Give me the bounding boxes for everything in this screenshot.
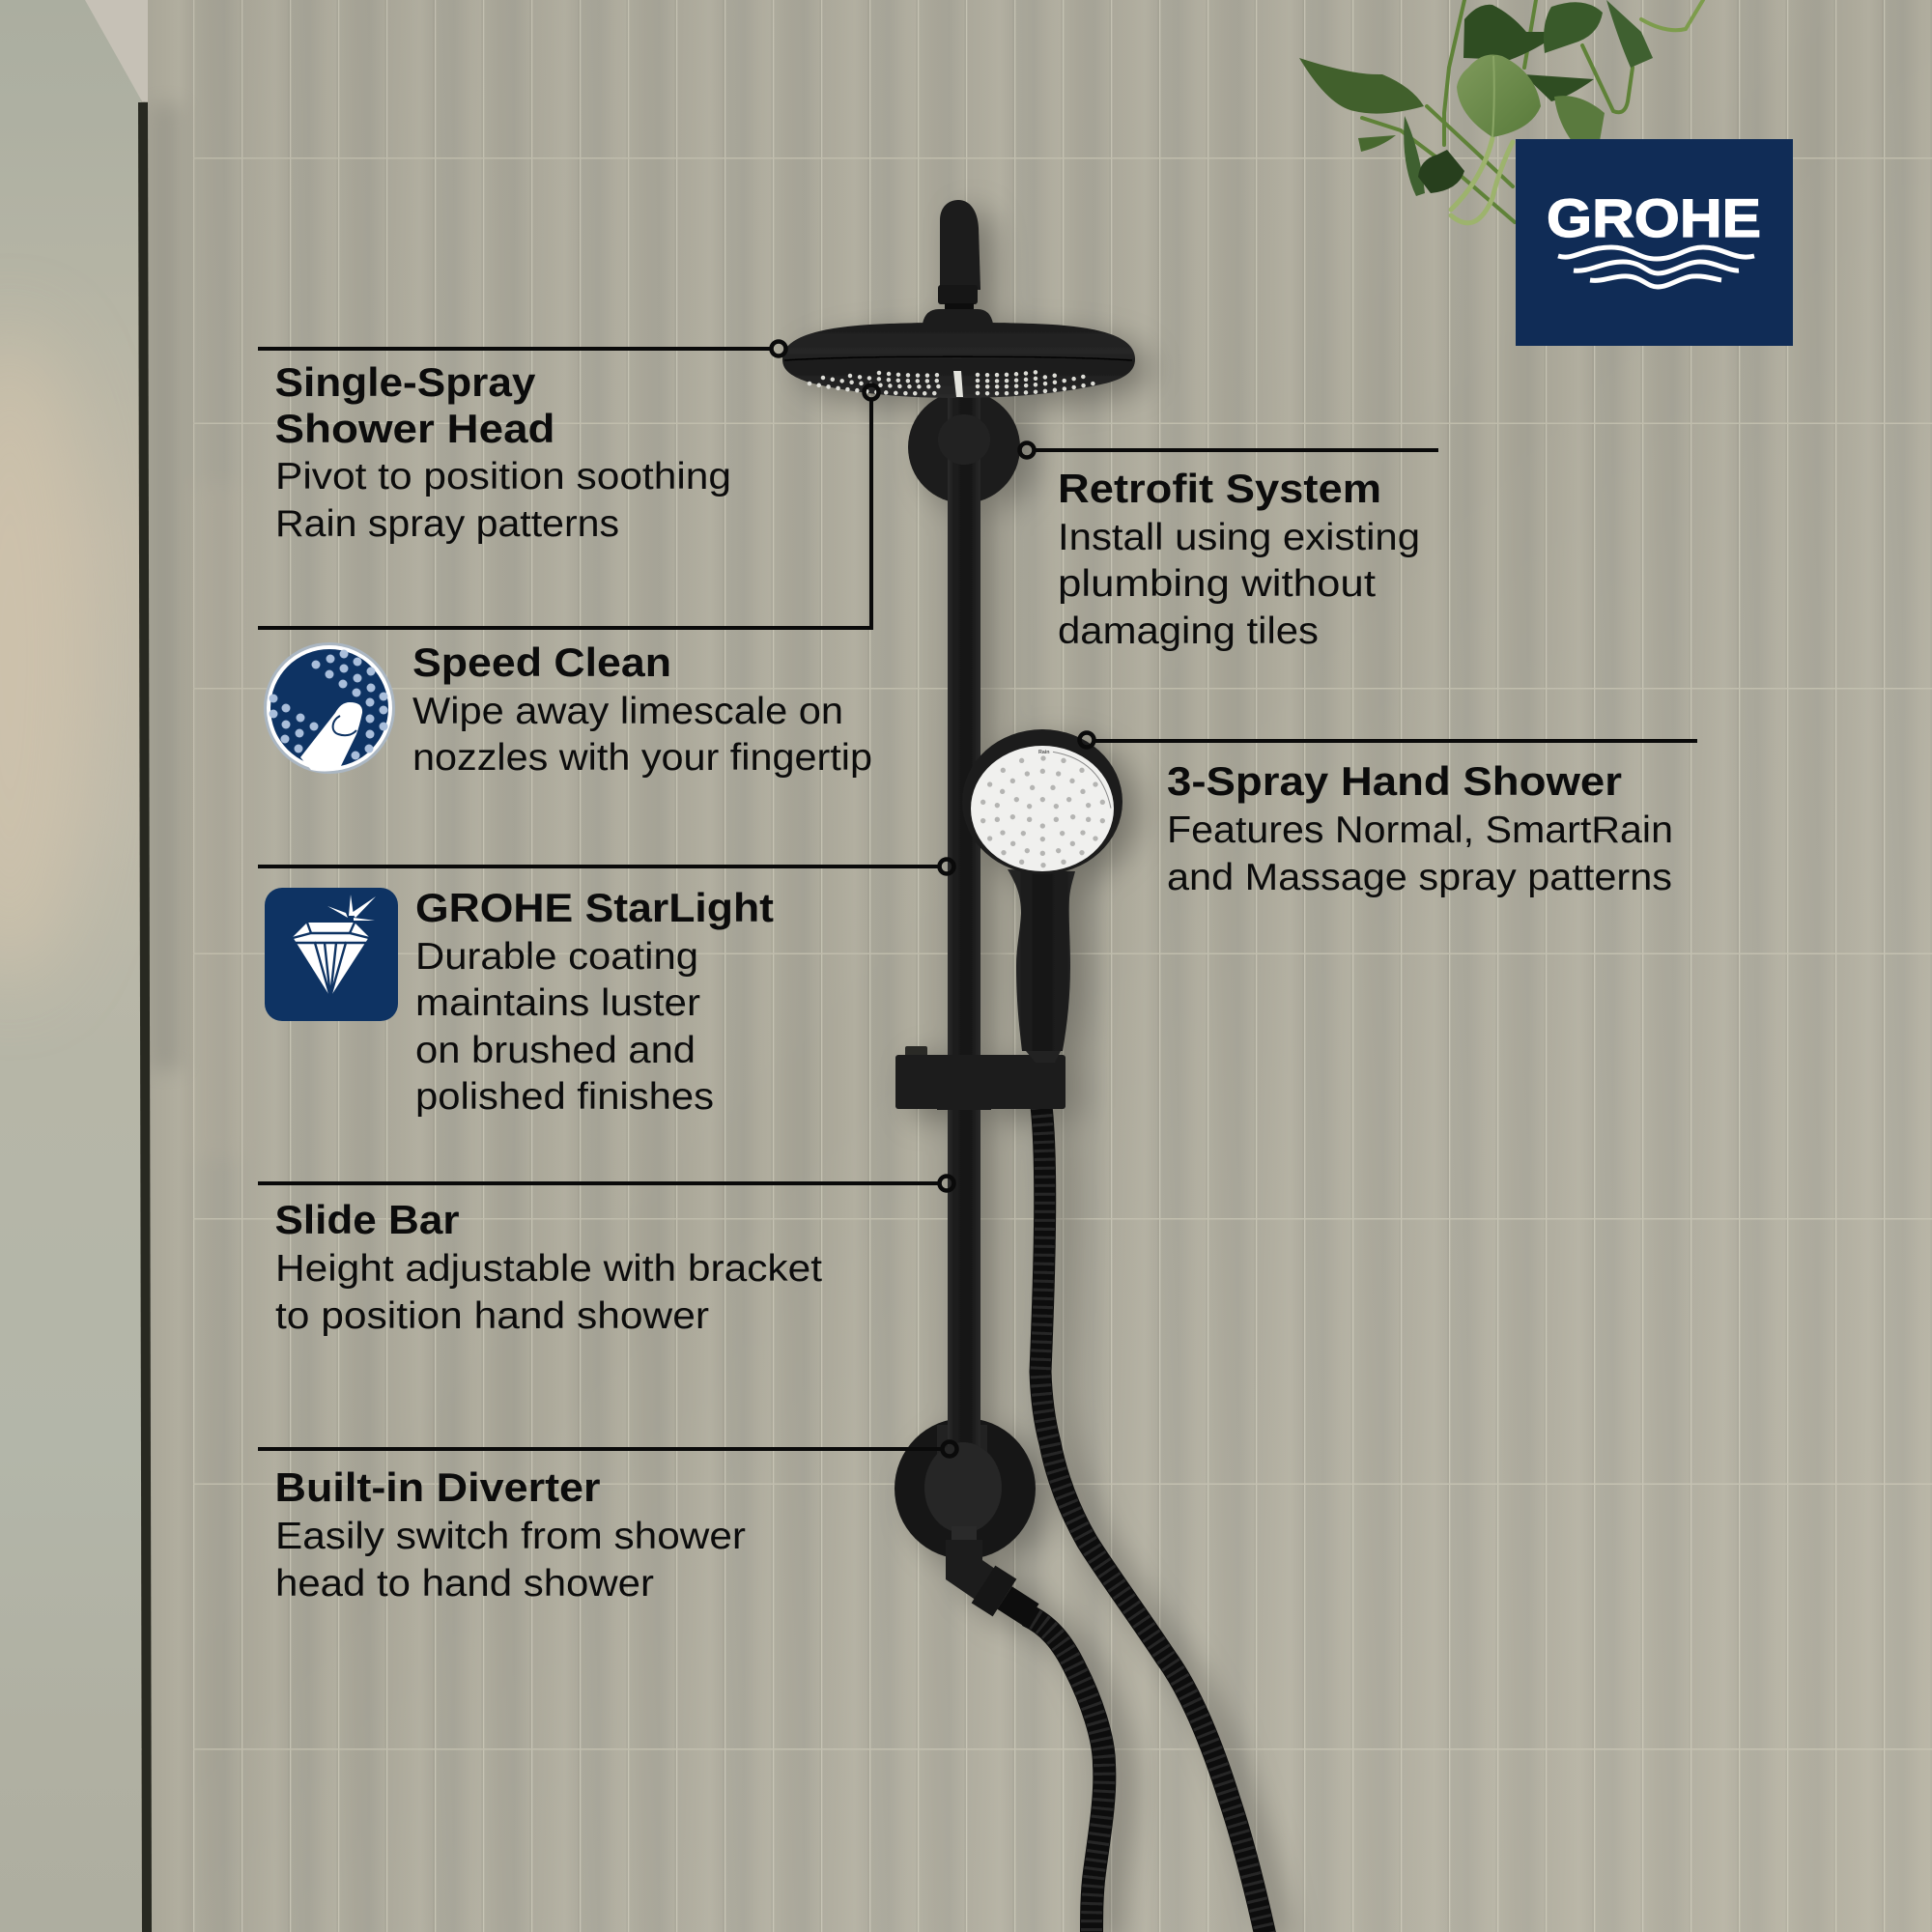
callout: Built-in Diverter: Easily switch from shower xyxy=(275,1516,746,1557)
callout: GROHE StarLight: maintains luster xyxy=(415,982,700,1024)
callout: Built-in Diverter xyxy=(258,1441,956,1605)
callout: GROHE StarLight: polished finishes xyxy=(415,1076,714,1118)
logo: GROHE: GROHE xyxy=(1547,187,1761,248)
callout: GROHE StarLight: GROHE StarLight xyxy=(415,885,774,930)
rain shower head xyxy=(782,323,1135,398)
callout: 3-Spray Hand Shower: Features Normal, SmartRain xyxy=(1167,810,1673,851)
glass shower panel xyxy=(0,0,152,1932)
icon: speed clean fingertip xyxy=(264,642,395,774)
callout: Single-Spray Shower Head: Single-Spray xyxy=(274,359,536,405)
upper wall plate xyxy=(908,391,1020,503)
hose: hand shower hose xyxy=(1027,1106,1265,1932)
callout: Single-Spray Shower Head: Shower Head xyxy=(274,406,554,451)
upper plate knob xyxy=(938,414,990,465)
icon: starlight diamond xyxy=(265,888,398,1021)
callout: Single-Spray Shower Head: Pivot to position soothing xyxy=(275,456,731,497)
callout: 3-Spray Hand Shower: and Massage spray patterns xyxy=(1167,857,1672,898)
callout: Single-Spray Shower Head xyxy=(258,342,786,545)
hand shower xyxy=(962,729,1122,1051)
hand shower: Rain xyxy=(1038,750,1050,755)
callout: Retrofit System: Install using existing xyxy=(1058,517,1420,558)
callout: Retrofit System: Retrofit System xyxy=(1058,466,1381,511)
callout: Built-in Diverter: Built-in Diverter xyxy=(274,1464,601,1510)
callout: GROHE StarLight: Durable coating xyxy=(415,936,698,978)
callout: 3-Spray Hand Shower: 3-Spray Hand Shower xyxy=(1167,758,1622,804)
callout: Retrofit System: plumbing without xyxy=(1058,563,1376,605)
shower system xyxy=(782,200,1265,1932)
plant xyxy=(1299,0,1703,223)
callout: Speed Clean: Speed Clean xyxy=(412,639,671,685)
callout: Retrofit System: damaging tiles xyxy=(1058,611,1319,652)
callout: GROHE StarLight: on brushed and xyxy=(415,1030,696,1071)
callout: Built-in Diverter: head to hand shower xyxy=(275,1563,654,1605)
callout: Slide Bar: to position hand shower xyxy=(275,1295,709,1337)
callout: Slide Bar: Slide Bar xyxy=(274,1197,460,1242)
callout: Retrofit System xyxy=(1020,442,1438,652)
callout: 3-Spray Hand Shower xyxy=(1080,732,1697,898)
callout: Speed Clean: Wipe away limescale on xyxy=(412,691,843,732)
callout: Single-Spray Shower Head: Rain spray patterns xyxy=(275,503,619,545)
built-in diverter xyxy=(895,1391,1036,1615)
gooseneck arm xyxy=(923,200,993,324)
logo: GROHE xyxy=(1516,139,1793,346)
callout: GROHE StarLight xyxy=(258,860,954,1118)
callout: Speed Clean: nozzles with your fingertip xyxy=(412,737,872,779)
sliding bracket xyxy=(895,1046,1065,1110)
callout: Slide Bar xyxy=(258,1177,954,1337)
slide bar xyxy=(948,386,980,1478)
callout: Slide Bar: Height adjustable with bracket xyxy=(275,1248,822,1290)
callout: Speed Clean xyxy=(258,384,879,779)
